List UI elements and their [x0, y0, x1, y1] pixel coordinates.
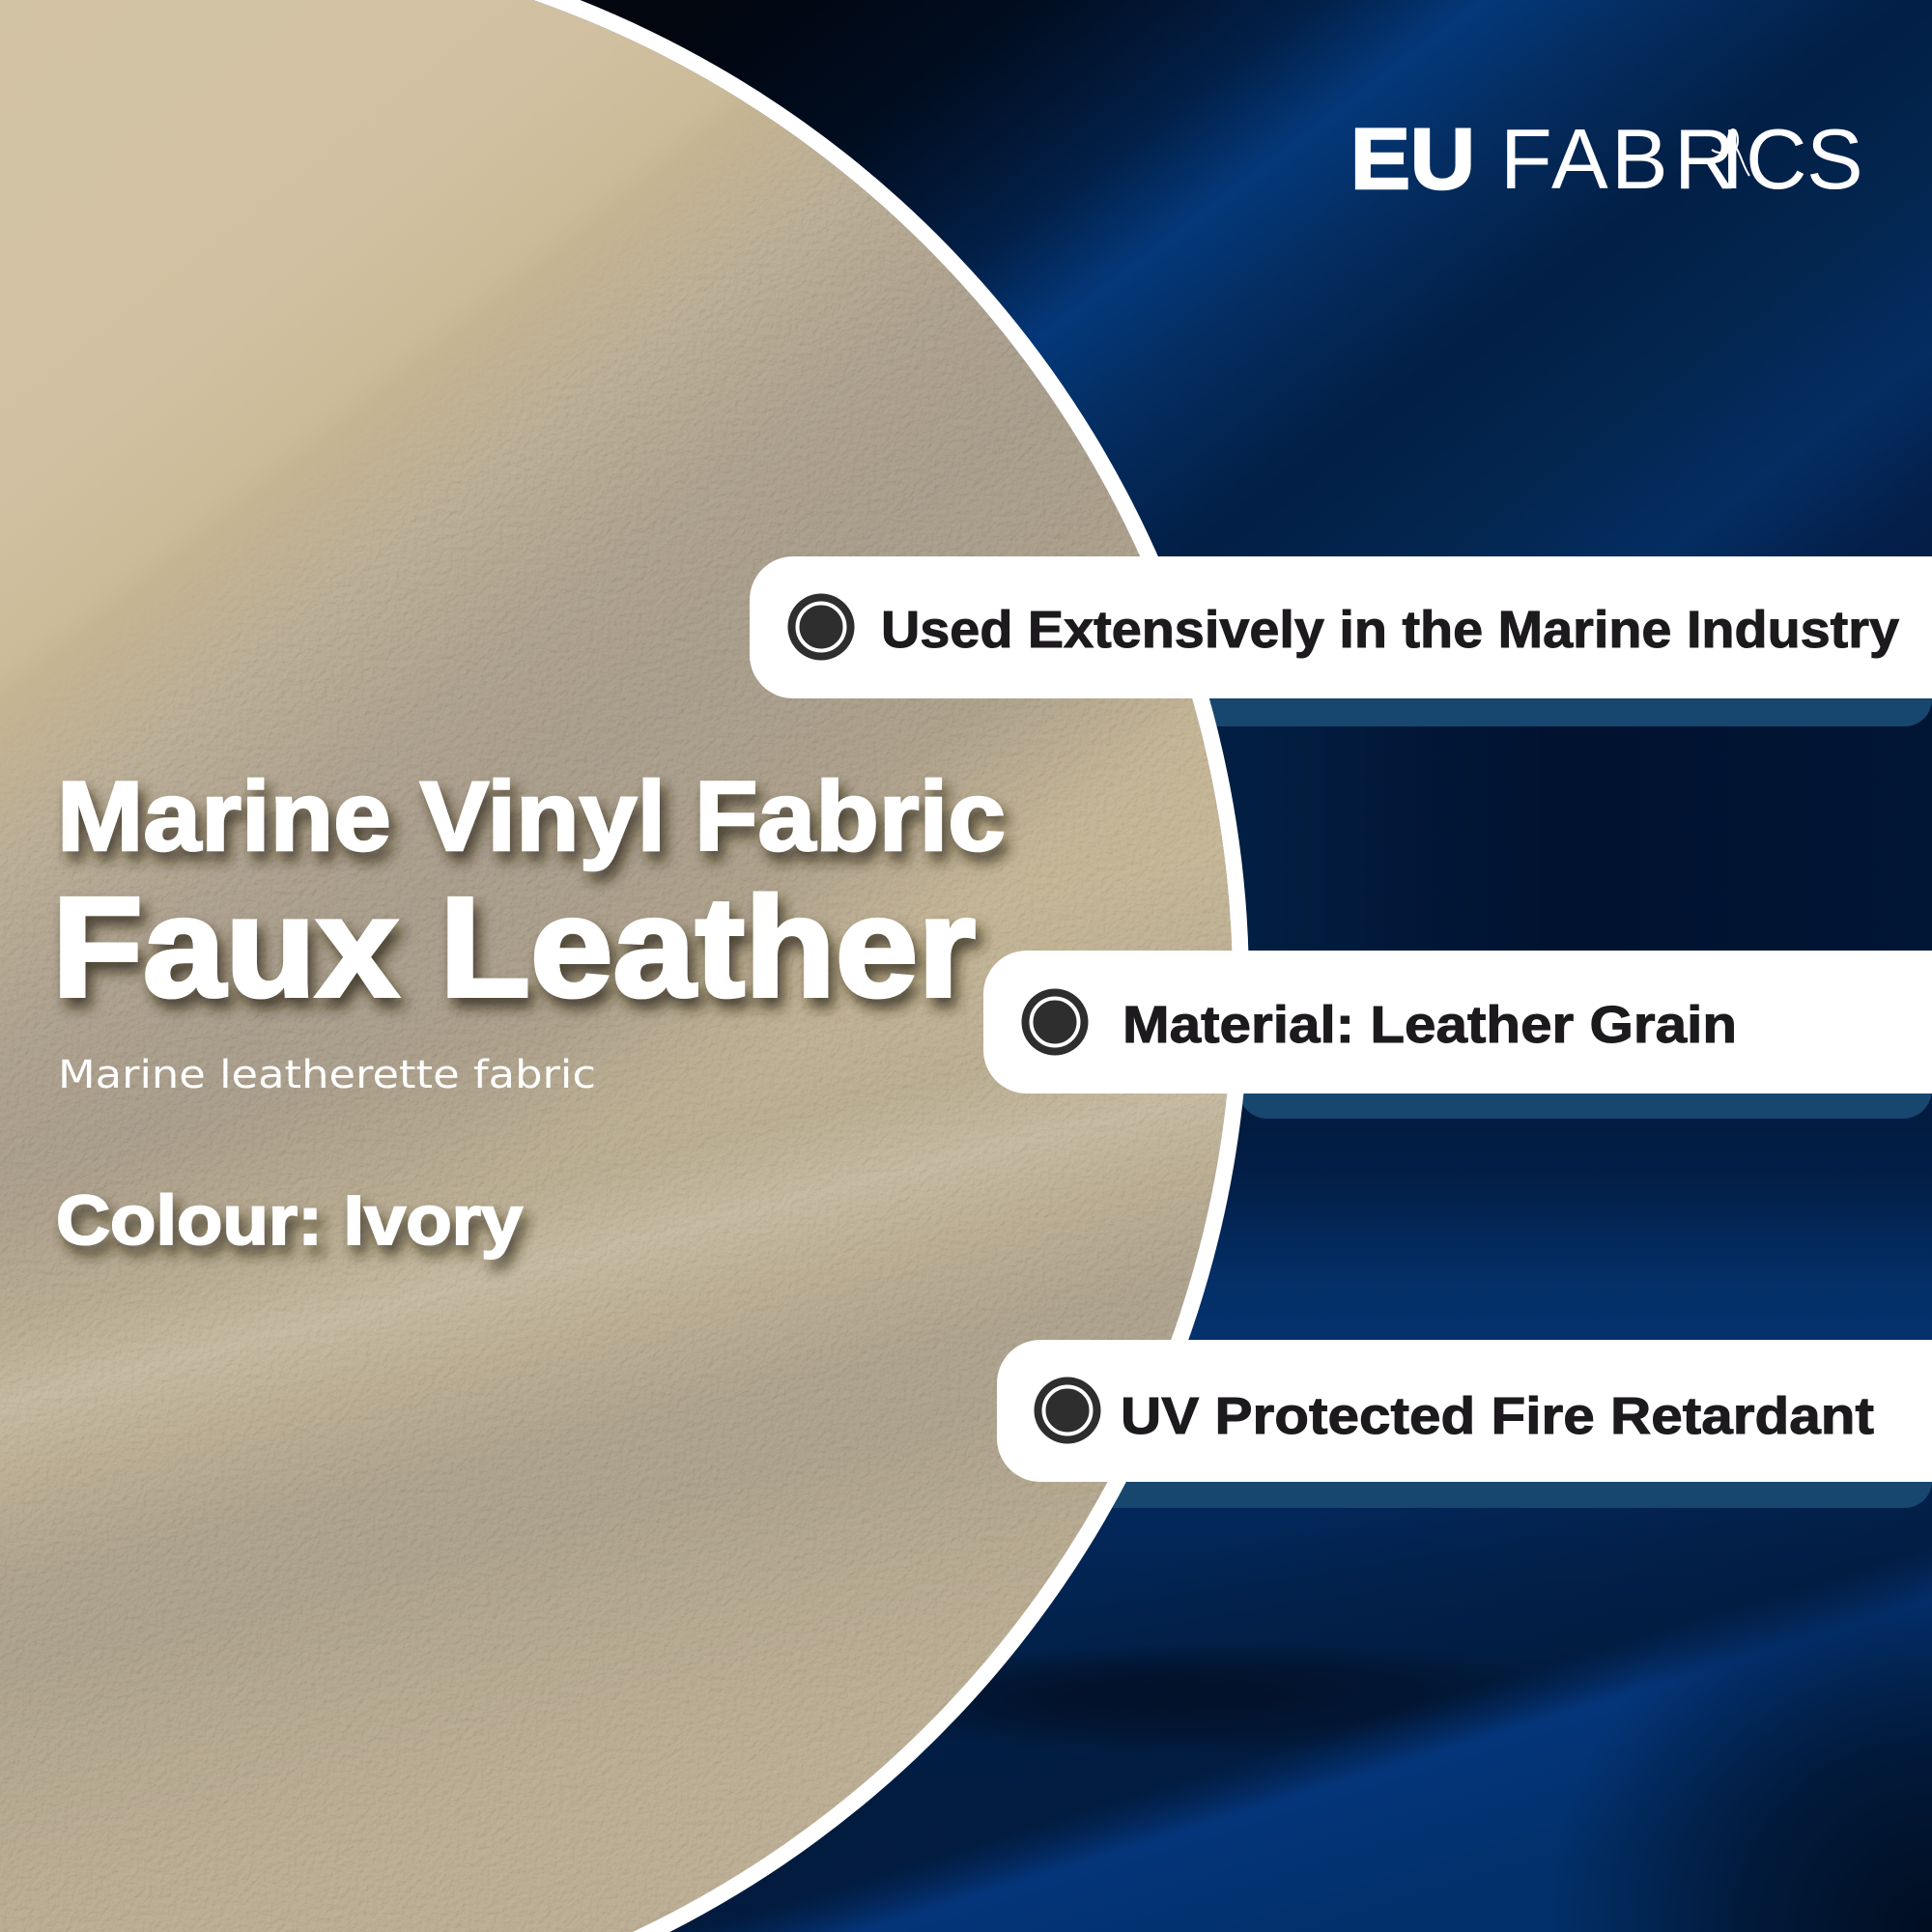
pill: Used Extensively in the Marine Industry: Used Extensively in the Marine Industry — [881, 601, 1899, 659]
pill: Material: Leather Grain: Material: Leather Grain — [1122, 996, 1737, 1054]
subtitle: Marine leatherette fabric: Marine leatherette fabric — [58, 1053, 596, 1097]
icon: bullet — [788, 593, 854, 661]
white ring around the swatch — [533, 0, 1249, 1932]
panel: accent tabs under the pills — [1043, 667, 1932, 1508]
pill: Used Extensively in the Marine Industry — [750, 556, 1932, 698]
pill: UV Protected Fire Retardant: UV Protected Fire Retardant — [1121, 1387, 1874, 1445]
icon: bullet — [1034, 1378, 1101, 1443]
panel: ivory leather circle swatch — [0, 0, 1256, 1932]
heading: Faux Leather: Faux Leather — [52, 868, 976, 1027]
pill: UV Protected Fire Retardant — [997, 1340, 1932, 1482]
title: Marine Vinyl Fabric: Marine Vinyl Fabric — [57, 761, 1006, 871]
logo: EU Fabrics: FABRICS — [1500, 111, 1863, 207]
logo: EU Fabrics: EU — [1350, 110, 1475, 207]
colour label: Colour: Ivory — [56, 1182, 523, 1260]
pill: Material: Leather Grain — [983, 951, 1932, 1094]
icon: bullet — [1022, 989, 1088, 1055]
